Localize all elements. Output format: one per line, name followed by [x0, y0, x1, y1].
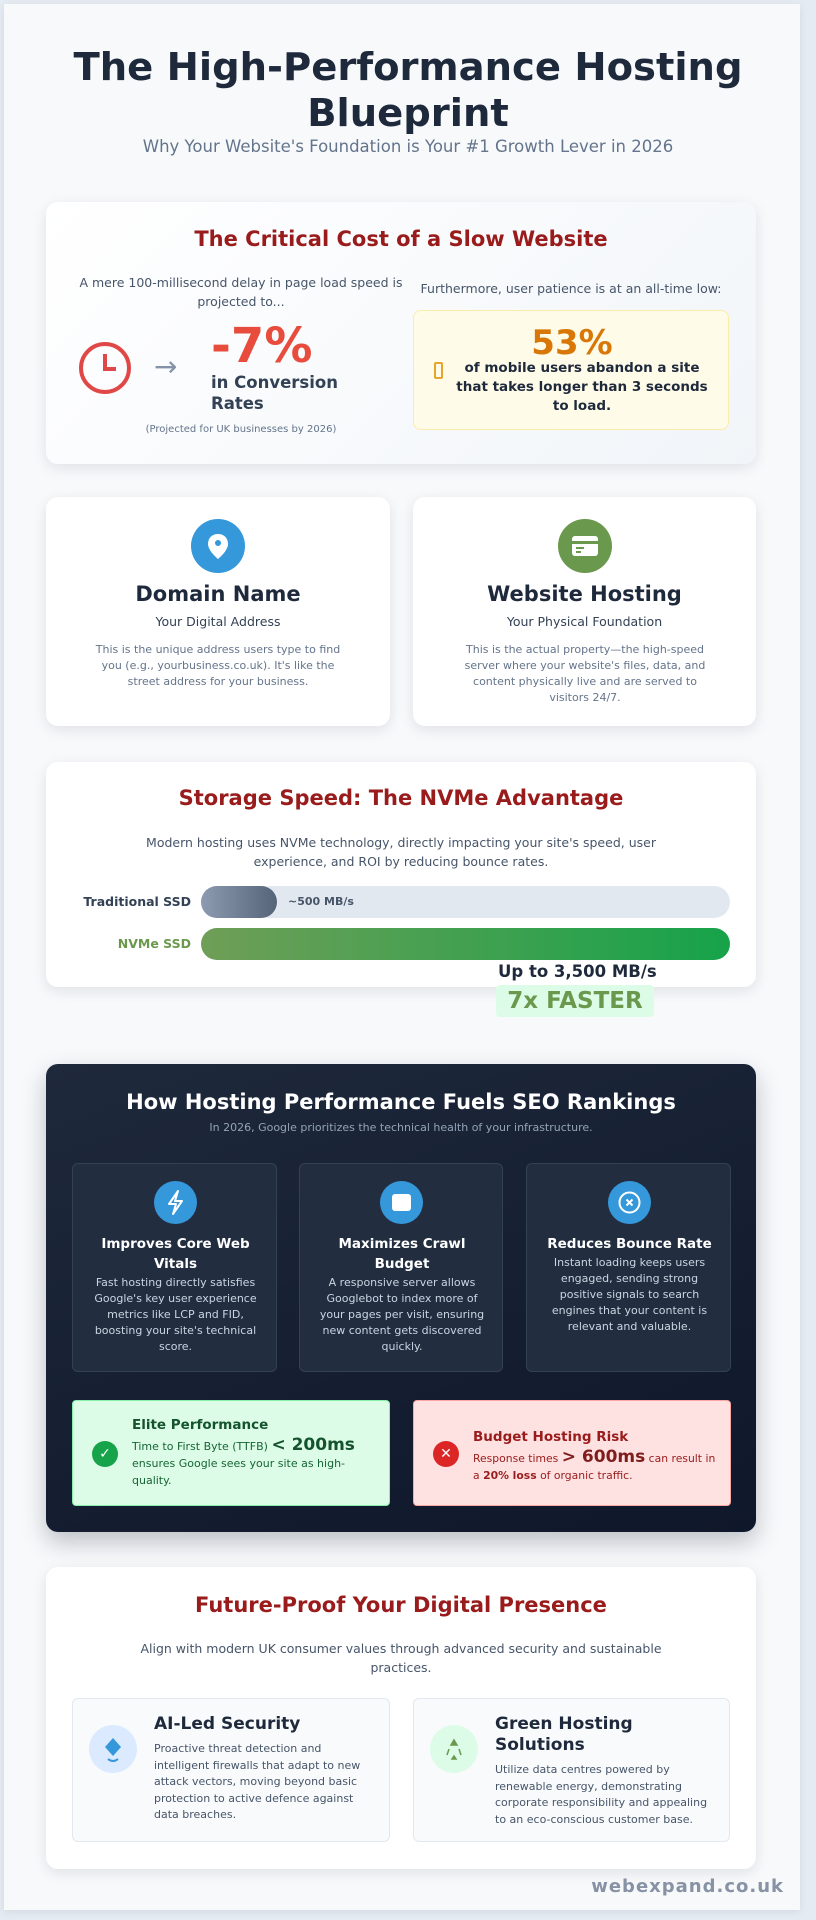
icon: shield [89, 1725, 137, 1773]
description: Align with modern UK consumer values through advanced security and sustainable practices. [140, 1641, 662, 1675]
icon: clock [79, 342, 131, 394]
callout: elite performance [72, 1400, 390, 1506]
stat label: Rates [211, 394, 264, 413]
stat 53%: 53% [531, 323, 613, 363]
speed label: Up to 3,500 MB/s [498, 962, 657, 981]
heading: Future-Proof Your Digital Presence [195, 1593, 607, 1617]
title: Improves Core Web Vitals [101, 1236, 250, 1272]
card: green hosting [413, 1698, 730, 1842]
subtitle: Why Your Website's Foundation is Your #1 Growth Lever in 2026 [143, 137, 673, 156]
label traditional: Traditional SSD [83, 894, 191, 909]
card: crawl budget [299, 1163, 503, 1372]
icon: phone [434, 362, 443, 379]
title: AI-Led Security [154, 1714, 300, 1734]
icon: window [380, 1181, 423, 1224]
icon: location pin [191, 519, 245, 573]
card: bounce rate [526, 1163, 731, 1372]
text: A responsive server allows Googlebot to index more of your pages per visit, ensuring new content gets discovered quickly. [320, 1276, 484, 1353]
heading: How Hosting Performance Fuels SEO Rankings [126, 1090, 676, 1114]
stat: -7%: -7% [211, 318, 312, 374]
icon: server card [558, 519, 612, 573]
icon: check [92, 1441, 118, 1467]
bar chart [83, 886, 730, 960]
title: Reduces Bounce Rate [547, 1236, 712, 1252]
panel: SEO [46, 1064, 756, 1532]
text: Time to First Byte (TTFB) < 200ms ensures Google sees your site as high-quality. [132, 1435, 355, 1487]
panel: NVMe [46, 762, 756, 987]
bar traditional [201, 886, 730, 918]
panel: future-proof [46, 1567, 756, 1869]
icon: recycle [430, 1725, 478, 1773]
icon: lightning [154, 1181, 197, 1224]
card: AI security [72, 1698, 390, 1842]
arrow: → [154, 350, 177, 383]
icon: check: ✓ [99, 1446, 111, 1462]
heading: The Critical Cost of a Slow Website [194, 227, 608, 251]
title: The High-Performance Hosting [73, 45, 743, 90]
title: Green Hosting Solutions [495, 1714, 633, 1755]
description: This is the actual property—the high-speed server where your website's files, data, and content physically live and are served to visitors 24/7. [465, 643, 705, 704]
text: Proactive threat detection and intelligent firewalls that adapt to new attack vectors, moving beyond basic protection to active defence against data breaches. [154, 1742, 360, 1821]
stat label [211, 373, 338, 413]
heading: Storage Speed: The NVMe Advantage [179, 786, 623, 810]
icon: x circle [608, 1181, 651, 1224]
title [73, 45, 743, 136]
description: Modern hosting uses NVMe technology, directly impacting your site's speed, user experience, and ROI by reducing bounce rates. [146, 835, 656, 869]
callout: budget risk [413, 1400, 731, 1506]
badge: 7x faster [496, 985, 654, 1017]
text: Instant loading keeps users engaged, sending strong positive signals to search engines that your content is relevant and valuable. [552, 1256, 707, 1333]
bar nvme [201, 928, 730, 960]
left intro text: A mere 100-millisecond delay in page load speed is projected to... [79, 275, 402, 309]
panel: critical cost [46, 202, 756, 464]
badge: 7x faster: 7x FASTER [507, 988, 643, 1014]
bar traditional: ~500 MB/s [288, 895, 354, 908]
panel: website hosting [413, 497, 756, 726]
label nvme: NVMe SSD [118, 936, 191, 951]
panel: domain name [46, 497, 390, 726]
footer: brand: webexpand.co.uk [591, 1876, 784, 1897]
subheading: Your Physical Foundation [507, 614, 662, 629]
card: core web vitals [72, 1163, 277, 1372]
heading: Domain Name [135, 582, 301, 606]
title: Budget Hosting Risk [473, 1429, 628, 1445]
subheading: Your Digital Address [156, 614, 280, 629]
stat label: in Conversion [211, 373, 338, 392]
icon: x: ✕ [440, 1446, 452, 1462]
title: Elite Performance [132, 1417, 268, 1433]
subheading: In 2026, Google prioritizes the technical health of your infrastructure. [209, 1121, 593, 1134]
callout: 53% [413, 310, 729, 430]
title: Maximizes Crawl Budget [338, 1236, 466, 1272]
stat text: of mobile users abandon a site that takes longer than 3 seconds to load. [456, 360, 708, 414]
text: Response times > 600ms can result in a 20% loss of organic traffic. [473, 1447, 715, 1482]
title: Blueprint [307, 91, 509, 136]
text: Fast hosting directly satisfies Google's key user experience metrics like LCP and FID, boosting your site's technical score. [94, 1276, 257, 1353]
icon: x [433, 1441, 459, 1467]
right intro text: Furthermore, user patience is at an all-time low: [421, 281, 721, 296]
heading: Website Hosting [487, 582, 682, 606]
description: This is the unique address users type to find you (e.g., yourbusiness.co.uk). It's like the street address for your business. [96, 643, 340, 688]
note: (Projected for UK businesses by 2026) [146, 424, 336, 435]
text: Utilize data centres powered by renewable energy, demonstrating corporate responsibility and appealing to an eco-conscious customer base. [495, 1763, 707, 1826]
